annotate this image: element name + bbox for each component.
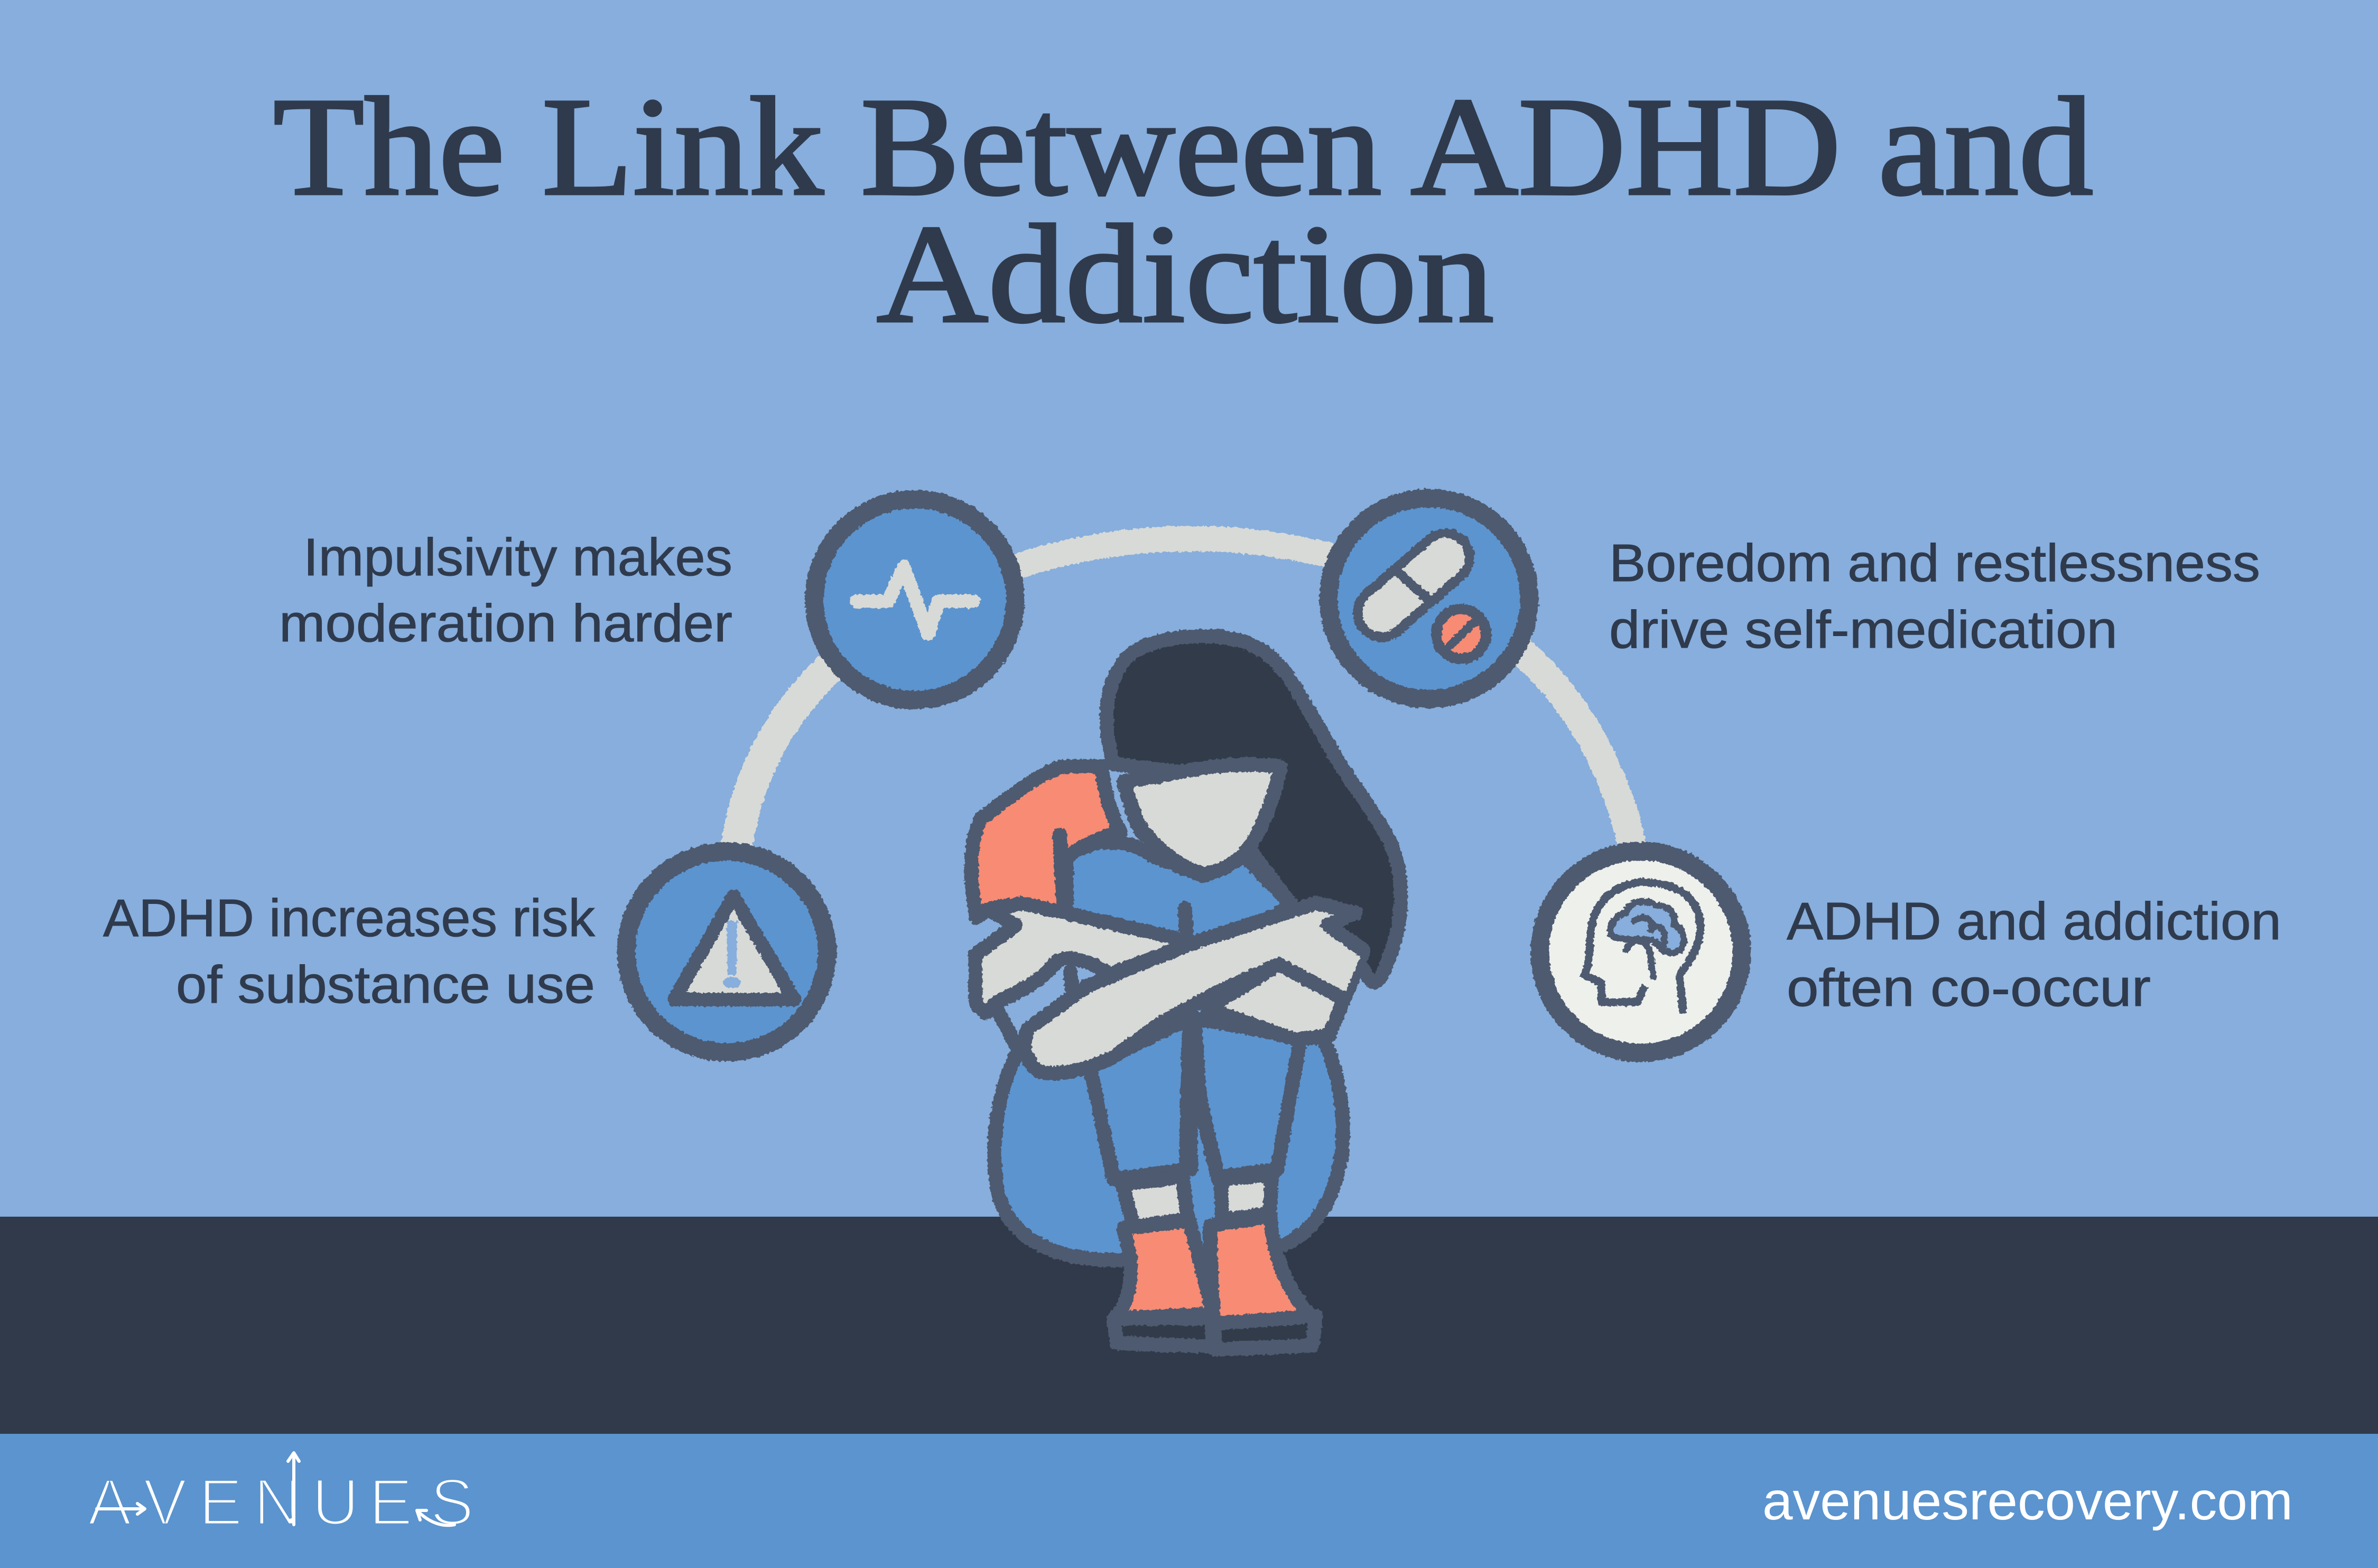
- gap between arms: [992, 964, 1103, 1042]
- inner arm lines: [996, 972, 1218, 1179]
- small tablet: [1436, 609, 1486, 659]
- back arm lower right: [1208, 952, 1363, 1040]
- head profile: [1584, 882, 1701, 1014]
- label: boredom: [1609, 534, 2260, 659]
- label: substance use risk: [103, 889, 596, 1014]
- face: [1123, 765, 1280, 874]
- icon: heartbeat circle: [814, 499, 1015, 700]
- label: co-occur: [1787, 892, 2281, 1018]
- title: Addiction: [877, 196, 1494, 352]
- front arm outline: [1025, 903, 1363, 1074]
- logo: AVENUES: [88, 1466, 474, 1539]
- back arm: [976, 903, 1194, 1013]
- shoe soles: [1113, 1316, 1316, 1349]
- sleeve: [971, 767, 1120, 918]
- front arm fill: [1025, 903, 1363, 1074]
- title: [273, 69, 2093, 352]
- icon: brain circle: [1540, 851, 1742, 1053]
- illustration: [626, 498, 1742, 1349]
- label: co-occur: often co-occur: [1787, 958, 2151, 1018]
- hips: [995, 1038, 1343, 1260]
- icon: warning circle: [626, 852, 827, 1052]
- figure: seated person: [971, 636, 1401, 1349]
- torso: [1066, 842, 1292, 950]
- clothing creases: [1060, 798, 1186, 937]
- label: impulsivity: moderation harder: [279, 594, 732, 653]
- label: substance use risk: of substance use: [176, 955, 595, 1014]
- brain: [1610, 901, 1684, 953]
- ground band: [0, 1217, 2378, 1434]
- label: boredom: Boredom and restlessness: [1609, 534, 2260, 593]
- brain folds and stem: [1627, 918, 1665, 977]
- label: co-occur: ADHD and addiction: [1787, 892, 2281, 951]
- label: boredom: drive self-medication: [1609, 600, 2117, 659]
- footer band: [0, 1434, 2378, 1568]
- label: substance use risk: ADHD increases risk: [103, 889, 596, 948]
- website url: avenuesrecovery.com: [1762, 1471, 2293, 1531]
- label: impulsivity: [279, 528, 732, 653]
- socks: [1122, 1174, 1272, 1227]
- hair: [1107, 636, 1401, 982]
- label: impulsivity: Impulsivity makes: [303, 528, 732, 587]
- exclamation mark: [723, 921, 741, 988]
- capsule: [1382, 557, 1445, 613]
- icon: pills circle: [1329, 498, 1529, 699]
- logo arrows: [97, 1453, 454, 1525]
- warning triangle: [674, 896, 794, 1000]
- shoes: [1115, 1216, 1313, 1323]
- legs: [1090, 1018, 1301, 1179]
- connecting arc: [735, 538, 1634, 856]
- title: The Link Between ADHD and: [273, 69, 2093, 225]
